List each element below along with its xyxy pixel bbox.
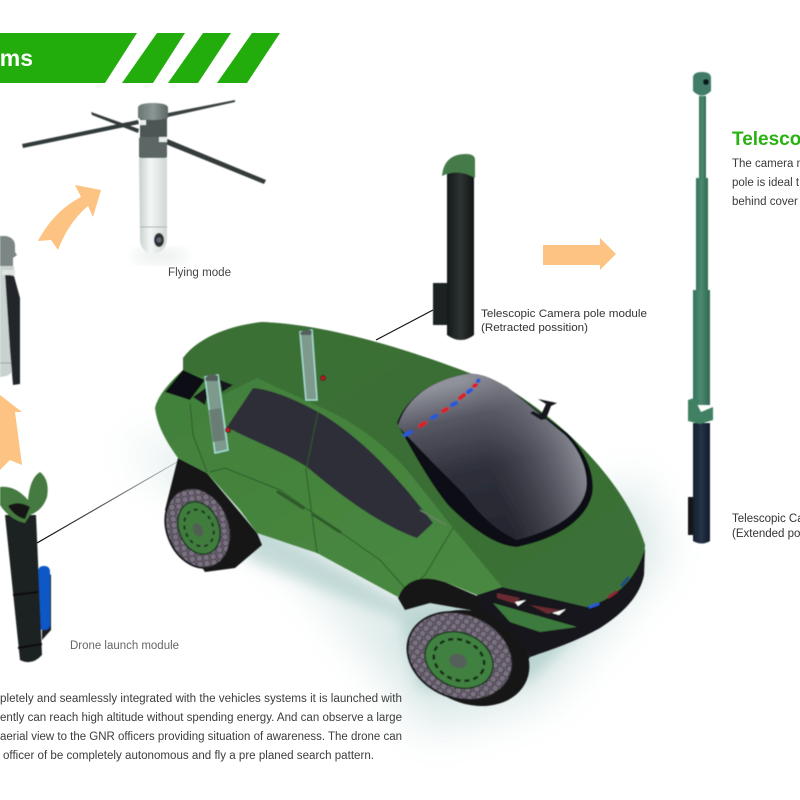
label: retracted pole: Telescopic Camera pole module: [481, 308, 647, 320]
text block: telescopic description: behind cover: [732, 196, 798, 208]
rear camera pole in vehicle: [205, 374, 228, 453]
side mirror: [530, 399, 557, 420]
wiper: [420, 510, 446, 525]
headlights: [497, 593, 566, 615]
text block: drone description: ently can reach high altitude without spending energy. And can observe a large: [0, 712, 402, 724]
door handles: [278, 492, 340, 532]
roof camera pole in vehicle: [300, 329, 317, 400]
body silhouette: [155, 322, 645, 607]
front bumper: [477, 548, 645, 657]
leader line: telescopic pole: [376, 310, 433, 340]
text block: drone description: pletely and seamlessly integrated with the vehicles systems it is launched with: [0, 693, 402, 705]
door seams and body lines: [190, 403, 453, 596]
text block: drone description: aerial view to the GNR officers providing situation of awareness. The drone can: [0, 731, 402, 743]
icon: drone launch module: [0, 472, 51, 662]
rear wheel: [154, 458, 262, 578]
lower green strip: [493, 603, 577, 632]
arrow: curved up to flying mode: [38, 185, 101, 250]
arrow: retracted to extended: [543, 238, 616, 270]
icon: extended telescopic pole: [688, 72, 713, 544]
side window: [227, 388, 433, 538]
vehicle: [154, 322, 645, 723]
label: flying mode: Flying mode: [168, 267, 231, 279]
icon: retracted telescopic pole: [433, 154, 475, 340]
rear opening: [165, 370, 205, 400]
heading: telescopic camera: Telesco: [732, 129, 800, 150]
red marker dots: [226, 376, 326, 432]
text block: telescopic description: [732, 158, 800, 208]
label: extended pole: [732, 513, 800, 540]
front wheel: [394, 593, 544, 723]
leader line: drone launch module: [37, 462, 177, 543]
text block: drone description: [0, 693, 402, 762]
label: retracted position: (Retracted possition): [481, 322, 588, 334]
text block: telescopic description: pole is ideal t: [732, 177, 800, 189]
police light bar: [405, 380, 478, 435]
windshield reflection: [398, 374, 587, 540]
body top and hood: [183, 322, 645, 607]
front marker lights: [590, 578, 628, 607]
label: extended pole: (Extended po: [732, 528, 800, 540]
windshield glass: [398, 374, 587, 540]
front wheel arch: [398, 579, 530, 672]
windshield surround: [397, 374, 593, 547]
icon: drone in flying mode: [22, 100, 266, 262]
arrow: launch module to folded drone: [0, 395, 22, 470]
text block: drone description: officer of be completely autonomous and fly a pre planed search pattern.: [3, 750, 374, 762]
label: drone launch module: Drone launch module: [70, 640, 179, 652]
background shadow of vehicle: [125, 445, 665, 730]
title banner: [0, 33, 280, 83]
icon: drone folded: [0, 236, 20, 385]
rear brace detail: [193, 380, 233, 405]
